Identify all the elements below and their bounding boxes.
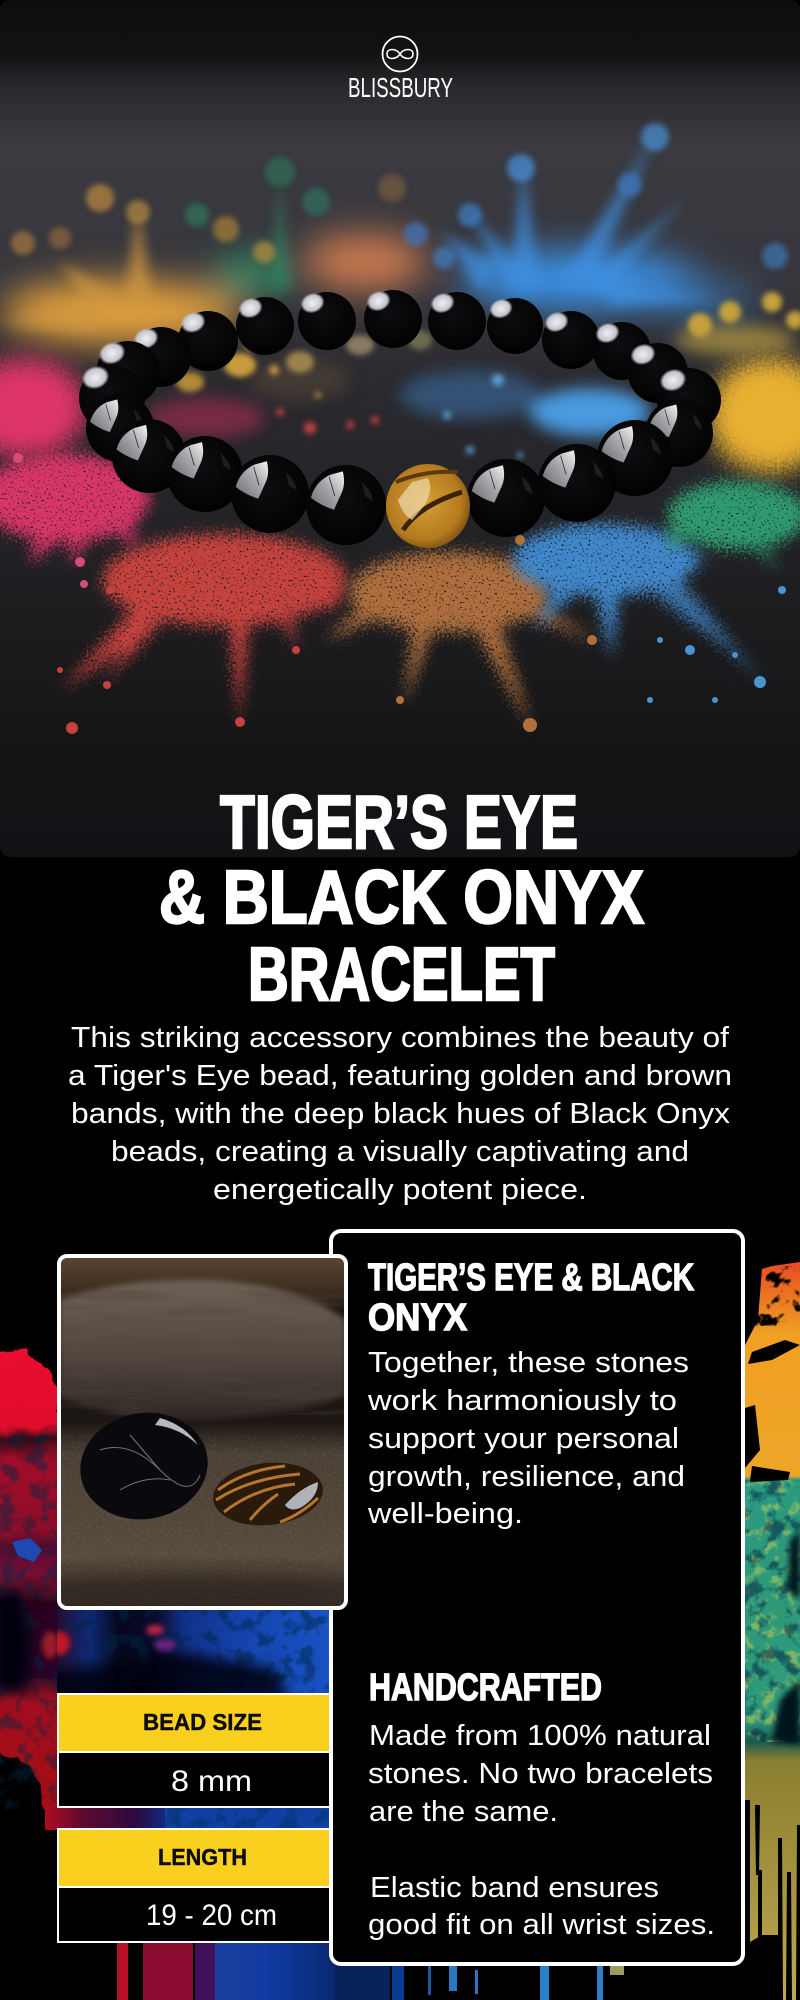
right paint splash <box>745 1258 800 2000</box>
text: handcrafted details: are the same. <box>369 1796 558 1828</box>
tiger's eye bead <box>386 464 470 548</box>
logo: wordmark: BLISSBURY <box>348 72 453 103</box>
brown powder burst <box>325 552 598 728</box>
bottom paint drips <box>117 1942 624 2000</box>
photo: two polished stones <box>57 1254 348 1610</box>
intro paragraph: bands, with the deep black hues of Black Onyx <box>71 1098 731 1130</box>
text: together <box>367 1347 689 1530</box>
spec table <box>58 1694 332 1942</box>
left paint splash <box>0 1348 62 1812</box>
text: together: growth, resilience, and <box>368 1461 685 1493</box>
intro paragraph: beads, creating a visually captivating and <box>111 1136 689 1168</box>
title <box>159 780 644 1016</box>
heading: tiger's eye & black onyx: ONYX <box>368 1297 468 1339</box>
logo: infinity circle <box>382 36 418 72</box>
length value <box>58 1887 332 1942</box>
mottled green overlay <box>745 1480 800 1742</box>
intro paragraph: energetically potent piece. <box>213 1174 587 1206</box>
length label <box>58 1829 332 1887</box>
text: handcrafted details: good fit on all wrist sizes. <box>368 1909 715 1941</box>
pink powder burst <box>0 358 150 566</box>
paint between table rows <box>45 1806 332 1830</box>
length value: 19 - 20 cm <box>146 1899 277 1932</box>
text: handcrafted details: Elastic band ensures <box>370 1872 659 1904</box>
blue paint band behind photo <box>57 1608 329 1693</box>
text: together: Together, these stones <box>368 1347 689 1379</box>
red powder burst <box>62 534 347 725</box>
text: handcrafted details: stones. No two bracelets <box>368 1758 713 1790</box>
warm reflections between back beads <box>176 330 432 392</box>
bead size label <box>58 1694 332 1752</box>
intro paragraph: This striking accessory combines the beauty of <box>71 1022 730 1054</box>
black blotches in orange <box>745 1258 800 1482</box>
interior ring glow <box>145 360 650 438</box>
bracelet <box>79 288 721 548</box>
black onyx stone <box>80 1412 208 1520</box>
title: BRACELET <box>248 932 555 1016</box>
right yellow burst <box>675 292 800 473</box>
top blurred powder bursts <box>0 123 788 344</box>
tiger's eye stone <box>213 1462 323 1526</box>
scattered powder specks <box>13 453 786 734</box>
large background rock <box>59 1280 346 1420</box>
text: handcrafted details: Made from 100% natural <box>369 1720 711 1752</box>
black drip columns <box>745 1800 800 2000</box>
intro paragraph <box>68 1022 732 1206</box>
title: & BLACK ONYX <box>159 855 644 939</box>
interior dust spots <box>245 340 523 458</box>
right green burst <box>668 481 800 570</box>
lower blue burst <box>513 524 765 684</box>
hero photo: bracelet on coloured powder <box>0 0 800 857</box>
intro paragraph: a Tiger's Eye bead, featuring golden and brown <box>68 1060 732 1092</box>
bead size value <box>58 1752 332 1807</box>
bead size label: BEAD SIZE <box>143 1709 262 1735</box>
length label: LENGTH <box>158 1844 247 1870</box>
bead size value: 8 mm <box>171 1765 252 1798</box>
text: together: well-being. <box>367 1498 523 1530</box>
heading: tiger's eye & black onyx <box>368 1257 694 1339</box>
text: together: work harmoniously to <box>367 1385 677 1417</box>
text: handcrafted details <box>368 1720 715 1941</box>
panel: description card <box>331 1231 743 1964</box>
title: TIGER’S EYE <box>220 780 578 864</box>
heading: handcrafted: HANDCRAFTED <box>369 1667 602 1709</box>
text: together: support your personal <box>368 1423 679 1455</box>
heading: tiger's eye & black onyx: TIGER’S EYE & BLACK <box>368 1257 694 1299</box>
